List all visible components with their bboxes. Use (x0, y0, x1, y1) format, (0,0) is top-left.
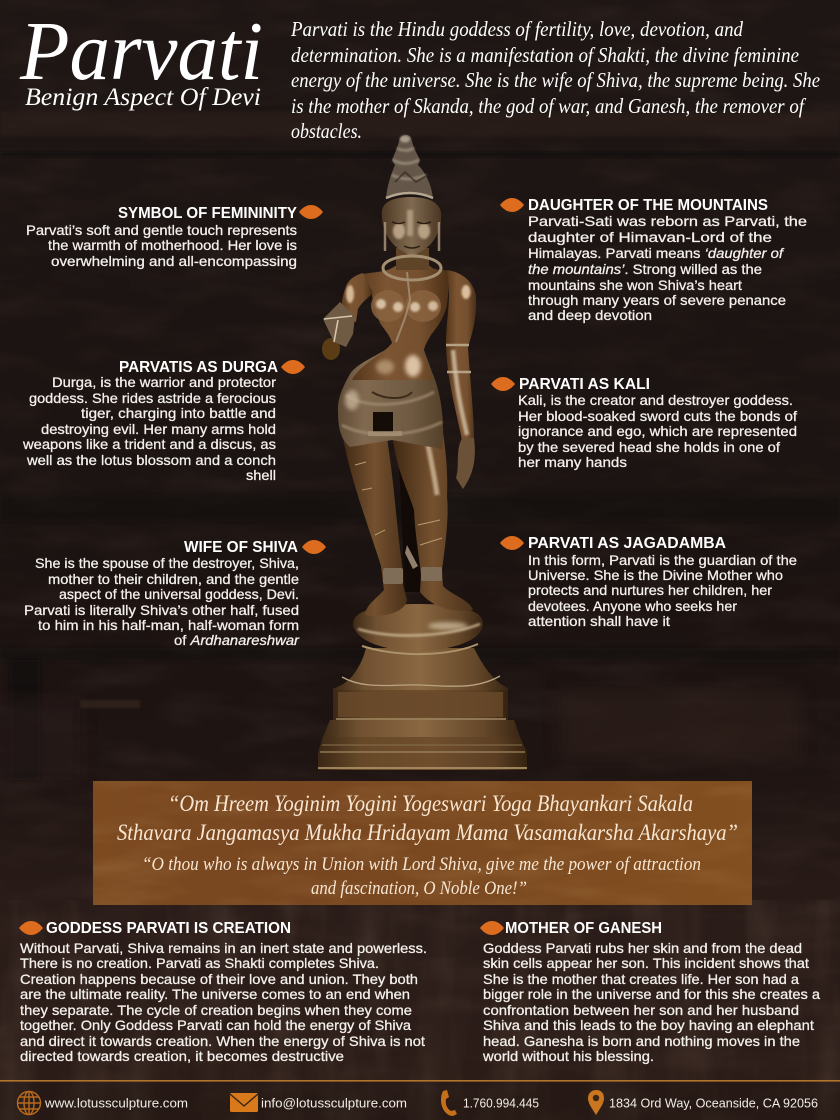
phone number: 1.760.994.445 (463, 1096, 539, 1110)
icon: map pin (588, 1090, 604, 1115)
section: Parvatis as Durga: destroying evil. Her many arms hold (41, 421, 276, 437)
section: mother of Ganesh: MOTHER OF GANESH (505, 920, 662, 937)
section: wife of Shiva (24, 539, 326, 648)
section: Parvati as Kali: Kali, is the creator and destroyer goddess. (518, 392, 793, 408)
right leg (392, 432, 473, 611)
mantra translation: “O thou who is always in Union with Lord Shiva, give me the power of attraction (142, 855, 701, 875)
mantra panel (93, 781, 752, 905)
section: daughter of the mountains: and deep devotion (528, 307, 652, 323)
section: symbol of femininity: SYMBOL OF FEMININITY (118, 205, 298, 222)
section: mother of Ganesh: head. Ganesha is born and nothing moves in the (483, 1033, 800, 1049)
footer (0, 1080, 840, 1120)
lotus bullet (500, 198, 524, 212)
lotus bullet (491, 377, 515, 391)
section: mother of Ganesh: She is the mother that creates life. Her son had a (483, 971, 799, 987)
section: Goddess Parvati is creation: are the ultimate reality. The universe comes to an end when (20, 986, 410, 1002)
mantra text (117, 791, 738, 845)
section: daughter of the mountains: Parvati-Sati was reborn as Parvati, the (528, 213, 807, 229)
section: wife of Shiva: Parvati is literally Shiva’s other half, fused (24, 602, 299, 618)
section: mother of Ganesh (480, 920, 820, 1064)
section: Goddess Parvati is creation: There is no creation. Parvati as Shakti completes Shiva. (20, 955, 379, 971)
section: mother of Ganesh: world without his blessing. (482, 1048, 654, 1064)
section: Parvati as Jagadamba: In this form, Parvati is the guardian of the (528, 552, 797, 568)
section: Parvatis as Durga: shell (246, 467, 276, 483)
email: info@lotussculpture.com (261, 1096, 407, 1110)
neck and collar (383, 245, 441, 280)
section: wife of Shiva: aspect of the universal goddess, Devi. (59, 586, 299, 602)
section: mother of Ganesh: Goddess Parvati rubs her skin and from the dead (483, 940, 802, 956)
lotus bullet (299, 205, 323, 219)
website: www.lotussculpture.com (44, 1096, 188, 1110)
lotus bullet (281, 360, 305, 374)
section: Parvati as Kali: ignorance and ego, which are represented (518, 423, 797, 439)
section: Goddess Parvati is creation: and direct it towards creation. When the energy of Shiva is not (20, 1033, 425, 1049)
hanging sash between legs (398, 440, 421, 592)
section: Goddess Parvati is creation (19, 920, 427, 1064)
section: Parvatis as Durga: well as the lotus blossom and a conch (26, 452, 276, 468)
section: symbol of femininity (26, 205, 323, 269)
section: Parvati as Jagadamba: Universe. She is the Divine Mother who (528, 567, 783, 583)
section: Parvatis as Durga: PARVATIS AS DURGA (119, 359, 278, 376)
section: daughter of the mountains: the mountains’ . Strong willed as the (528, 261, 762, 277)
section: Parvati as Jagadamba (500, 535, 797, 629)
icon: envelope (230, 1093, 258, 1112)
lotus bullet (302, 540, 326, 554)
section: Goddess Parvati is creation: Creation happens because of their love and union. They both (20, 971, 418, 987)
mantra text: “Om Hreem Yoginim Yogini Yogeswari Yoga Bhayankari Sakala (168, 791, 693, 816)
lotus bullet (480, 921, 504, 935)
section: wife of Shiva: to him in his half-man, half-woman form (38, 617, 299, 633)
skirt (338, 345, 443, 449)
intro paragraph: determination. She is a manifestation of Shakti, the divine feminine (291, 43, 799, 67)
mantra translation: and fascination, O Noble One!” (311, 879, 527, 899)
section: wife of Shiva: of Ardhanareshwar (174, 632, 300, 648)
statue of Parvati (318, 135, 527, 770)
section: wife of Shiva: She is the spouse of the destroyer, Shiva, (35, 555, 299, 571)
section: symbol of femininity: Parvati’s soft and gentle touch represents (26, 222, 297, 238)
section: mother of Ganesh: bigger role in the universe and for this she creates a (483, 986, 820, 1002)
section: daughter of the mountains: daughter of Himavan-Lord of the (528, 229, 772, 245)
section: Parvati as Kali: PARVATI AS KALI (519, 376, 650, 393)
section: mother of Ganesh: confrontation between her son and her husband (483, 1002, 799, 1018)
section: Parvati as Kali: by the severed head she holds in one of (518, 439, 780, 455)
torso (352, 266, 450, 380)
statue base (318, 604, 527, 770)
intro paragraph (290, 17, 820, 143)
section: Parvatis as Durga: Durga, is the warrior and protector (52, 374, 276, 390)
title: Parvati (19, 5, 263, 98)
lotus bullet (19, 921, 43, 935)
subtitle: Benign Aspect Of Devi (25, 84, 261, 111)
section: symbol of femininity: the warmth of motherhood. Her love is (48, 237, 297, 253)
mantra translation (142, 855, 701, 899)
section: symbol of femininity: overwhelming and all-encompassing (51, 253, 297, 269)
lowered arm and hand (446, 270, 476, 489)
section: Goddess Parvati is creation: Without Parvati, Shiva remains in an inert state and powerless. (20, 940, 427, 956)
section: daughter of the mountains (500, 197, 807, 323)
section: Parvati as Jagadamba: protects and nurtures her children, her (528, 582, 772, 598)
mantra text: Sthavara Jangamasya Mukha Hridayam Mama Vasamakarsha Akarshaya” (117, 820, 738, 845)
section: Parvatis as Durga: tiger, charging into battle and (81, 405, 276, 421)
section: Parvati as Jagadamba: PARVATI AS JAGADAMBA (528, 535, 726, 552)
face (382, 197, 441, 254)
section: Parvatis as Durga: weapons like a trident and a discus, as (22, 436, 276, 452)
section: daughter of the mountains: DAUGHTER OF THE MOUNTAINS (528, 197, 768, 214)
section: Parvati as Kali: Her blood-soaked sword cuts the bonds of (518, 408, 797, 424)
section: Goddess Parvati is creation: together. Only Goddess Parvati can hold the energy of Shiva (20, 1017, 411, 1033)
section: Parvati as Jagadamba: attention shall have it (528, 613, 670, 629)
intro paragraph: obstacles. (291, 119, 362, 143)
address: 1834 Ord Way, Oceanside, CA 92056 (609, 1096, 818, 1110)
section: mother of Ganesh: Shiva and this leads to the boy having an elephant (483, 1017, 814, 1033)
section: Parvati as Kali (491, 376, 797, 470)
icon: phone (441, 1090, 457, 1116)
section: daughter of the mountains: mountains she won Shiva’s heart (528, 277, 742, 293)
section: Goddess Parvati is creation: directed towards creation, it becomes destructive (20, 1048, 344, 1064)
section: Parvati as Jagadamba: devotees. Anyone who seeks her (528, 598, 737, 614)
section: Parvatis as Durga: goddess. She rides astride a ferocious (29, 390, 276, 406)
crown (386, 135, 433, 199)
section: Goddess Parvati is creation: GODDESS PARVATI IS CREATION (46, 920, 291, 937)
section: daughter of the mountains: Himalayas. Parvati means ‘daughter of (528, 245, 785, 261)
section: wife of Shiva: WIFE OF SHIVA (184, 539, 298, 556)
left leg (342, 432, 407, 616)
raised arm and hand with flower (322, 273, 373, 360)
section: Parvatis as Durga (22, 359, 305, 483)
section: daughter of the mountains: through many years of severe penance (528, 292, 786, 308)
section: Goddess Parvati is creation: they separate. The cycle of creation begins when they come (20, 1002, 412, 1018)
icon: globe (18, 1092, 40, 1114)
section: Parvati as Kali: her many hands (518, 454, 627, 470)
intro paragraph: Parvati is the Hindu goddess of fertility, love, devotion, and (290, 17, 743, 41)
lotus bullet (500, 536, 524, 550)
section: mother of Ganesh: skin cells appear her son. This incident shows that (483, 955, 809, 971)
section: wife of Shiva: mother to their children, and the gentle (48, 571, 299, 587)
